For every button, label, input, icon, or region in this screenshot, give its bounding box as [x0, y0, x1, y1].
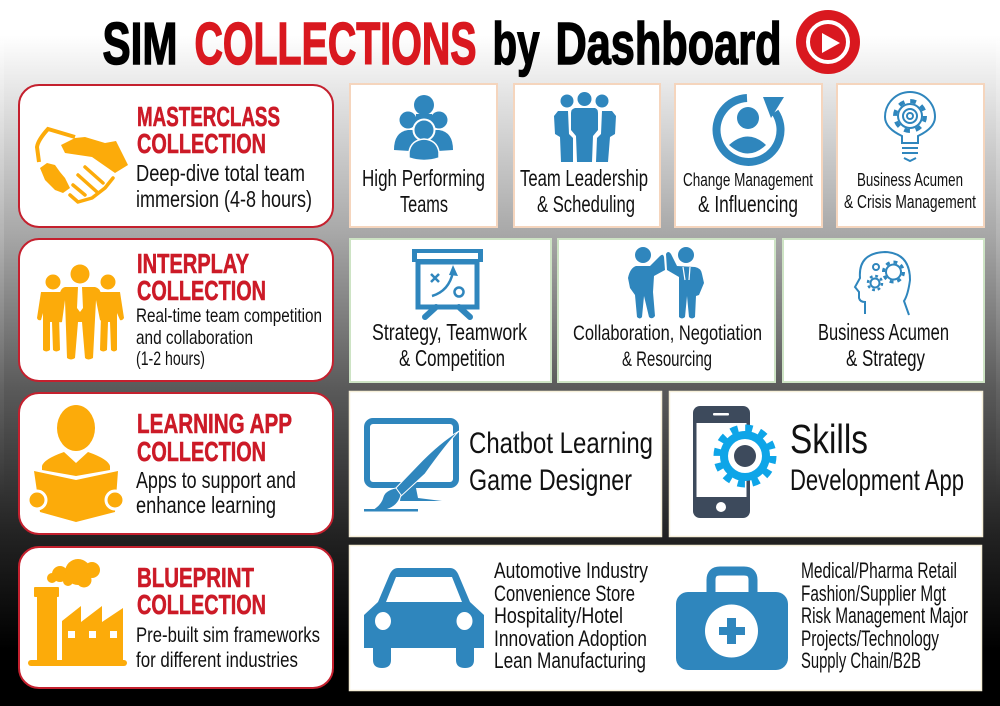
- card: high performing teams: [350, 84, 497, 227]
- panel: masterclass collection: MASTERCLASS: [137, 101, 280, 132]
- card: business acumen and strategy: & Strategy: [846, 345, 925, 371]
- card: change management: [675, 84, 822, 227]
- card: business acumen and crisis management: [837, 84, 984, 227]
- text: industries column two: [801, 558, 968, 673]
- panel: learning app collection: LEARNING APP: [137, 408, 292, 439]
- card: collaboration, negotiation and resourcing: [558, 239, 775, 382]
- title: COLLECTIONS: [194, 11, 476, 77]
- text: industries column one: Automotive Industry: [494, 558, 648, 583]
- icon: person in rotating arrow: [717, 97, 784, 162]
- icon: medical case: [676, 571, 788, 670]
- card: chatbot learning game designer: Chatbot Learning: [469, 427, 653, 460]
- icon: light bulb with gear: [885, 92, 935, 161]
- card: high performing teams: High Performing: [362, 165, 485, 191]
- icon: head with gears: [855, 252, 910, 315]
- card: strategy, teamwork and competition: Strategy, Teamwork: [372, 319, 527, 345]
- icon: phone with gear: [693, 406, 773, 518]
- icon: monitor with paint brush: [364, 421, 459, 512]
- panel: interplay collection: INTERPLAY: [137, 248, 249, 279]
- title: SIM: [102, 11, 178, 77]
- panel: interplay collection: Real-time team competition: [136, 305, 322, 327]
- card: change management: Change Management: [683, 170, 813, 190]
- card: blueprint industries: [350, 546, 982, 690]
- icon: car: [364, 568, 484, 668]
- title: [102, 11, 782, 77]
- card: team leadership: & Scheduling: [537, 191, 635, 217]
- card: strategy, teamwork and competition: & Competition: [399, 345, 505, 371]
- panel: blueprint collection: for different industries: [136, 649, 298, 672]
- text: industries column one: Hospitality/Hotel: [494, 603, 623, 628]
- panel: blueprint collection: BLUEPRINT: [137, 562, 254, 593]
- text: industries column two: Supply Chain/B2B: [801, 648, 921, 673]
- icon: team of three: [37, 264, 124, 360]
- card: high performing teams: Teams: [400, 191, 448, 217]
- panel: blueprint collection: COLLECTION: [137, 589, 266, 620]
- panel: interplay collection: and collaboration: [136, 327, 253, 349]
- panel: blueprint collection: [19, 547, 333, 688]
- text: industries column two: Projects/Technology: [801, 626, 939, 651]
- panel: blueprint collection: Pre-built sim frameworks: [136, 624, 320, 647]
- text: industries column one: Lean Manufacturing: [494, 648, 646, 673]
- text: industries column one: Convenience Store: [494, 581, 635, 606]
- panel: masterclass collection: Deep-dive total team: [136, 160, 305, 186]
- card: strategy, teamwork and competition: [350, 239, 551, 382]
- panel: masterclass collection: [19, 85, 333, 227]
- card: business acumen and strategy: Business Acumen: [818, 319, 949, 345]
- icon: factory: [28, 559, 127, 666]
- icon: two people high five: [628, 247, 704, 318]
- title: by: [492, 11, 540, 77]
- icon: three suited people: [554, 92, 616, 162]
- card: team leadership: [514, 84, 660, 227]
- card: business acumen and strategy: [783, 239, 984, 382]
- panel: interplay collection: (1-2 hours): [136, 348, 205, 370]
- panel: learning app collection: COLLECTION: [137, 436, 266, 467]
- card: chatbot learning game designer: [350, 392, 662, 536]
- panel: learning app collection: [19, 393, 333, 534]
- panel: masterclass collection: COLLECTION: [137, 128, 266, 159]
- card: collaboration, negotiation and resourcing: Collaboration, Negotiation: [573, 322, 762, 345]
- icon: presentation board: [412, 249, 483, 317]
- panel: masterclass collection: immersion (4-8 hours): [136, 186, 312, 212]
- icon: person reading book: [28, 405, 124, 522]
- text: industries column one: Innovation Adoption: [494, 626, 647, 651]
- icon: handshake: [37, 129, 128, 202]
- card: collaboration, negotiation and resourcing: & Resourcing: [622, 348, 712, 371]
- panel: learning app collection: Apps to support and: [136, 467, 296, 493]
- card: change management: & Influencing: [698, 191, 798, 217]
- card: skills development app: [670, 392, 982, 536]
- card: team leadership: Team Leadership: [520, 165, 648, 191]
- text: industries column one: [494, 558, 648, 673]
- icon: play button: [796, 10, 860, 74]
- icon: group of people: [394, 95, 453, 160]
- panel: interplay collection: COLLECTION: [137, 275, 266, 306]
- panel: learning app collection: enhance learning: [136, 492, 276, 518]
- card: chatbot learning game designer: Game Designer: [469, 464, 632, 497]
- card: skills development app: Skills: [790, 416, 868, 462]
- panel: interplay collection: [19, 239, 333, 381]
- title: Dashboard: [556, 11, 782, 77]
- card: business acumen and crisis management: Business Acumen: [857, 170, 963, 190]
